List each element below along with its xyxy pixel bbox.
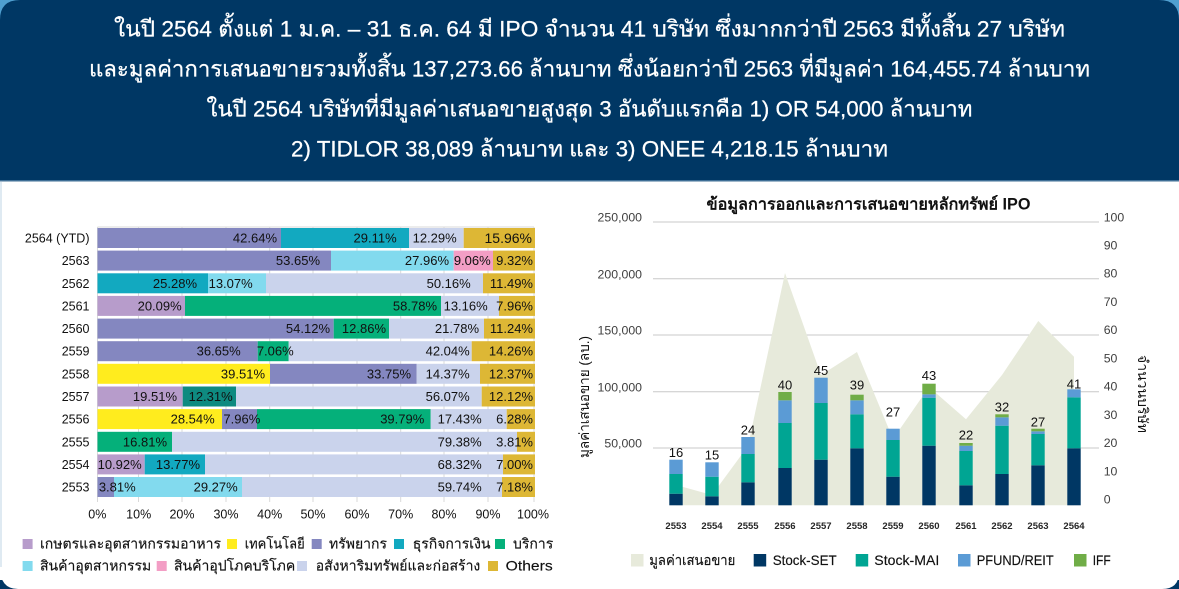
bar 2558: 2558 bbox=[846, 521, 868, 532]
row 2557: 56.07% bbox=[426, 389, 470, 404]
row 2556 bbox=[62, 409, 535, 429]
bar 2560: 43 bbox=[922, 368, 936, 383]
row 2556: 7.96% bbox=[223, 412, 261, 427]
right axis labels: 60 bbox=[1104, 323, 1118, 337]
percent axis labels: 10% bbox=[126, 508, 151, 522]
row 2563: 53.65% bbox=[276, 253, 320, 268]
right axis labels: 0 bbox=[1104, 492, 1111, 506]
row 2561: 2561 bbox=[62, 299, 90, 313]
bar 2553: 2553 bbox=[665, 521, 687, 532]
legend: sectors: ทรัพยากร bbox=[329, 536, 388, 552]
row 2560: 21.78% bbox=[435, 321, 479, 336]
row 2560: 54.12% bbox=[286, 321, 330, 336]
row 2559: 14.26% bbox=[489, 344, 533, 359]
row 2563 bbox=[62, 251, 535, 271]
percent axis labels: 40% bbox=[257, 508, 282, 522]
bar 2557: 2557 bbox=[810, 521, 832, 532]
percent axis labels bbox=[88, 508, 549, 522]
row 2558: 12.37% bbox=[489, 366, 533, 381]
header text line 3: ในปี 2564 บริษัทที่มีมูลค่าเสนอขายสูงสุด 3 อันดับแรกคือ 1) OR 54,000 ล้านบาท bbox=[206, 92, 972, 122]
header text line 2: และมูลค่าการเสนอขายรวมทั้งสิ้น 137,273.66 ล้านบาท ซึ่งน้อยกว่าปี 2563 ที่มีมูลค่า 164,455.74 ล้านบาท bbox=[89, 52, 1090, 82]
row 2562 bbox=[62, 273, 535, 293]
bar 2559: 27 bbox=[886, 404, 900, 420]
legend: sectors: เทคโนโลยี bbox=[245, 536, 305, 552]
row 2558: 33.75% bbox=[367, 366, 411, 381]
row 2553 bbox=[62, 477, 535, 497]
legend: sectors: สินค้าอุปโภคบริโภค bbox=[174, 558, 295, 574]
row 2553: 7.18% bbox=[496, 480, 533, 494]
bar 2556: 40 bbox=[778, 378, 792, 392]
row 2560: 11.24% bbox=[490, 321, 533, 336]
row 2562: 11.49% bbox=[490, 276, 533, 291]
row 2563: 27.96% bbox=[405, 253, 449, 268]
row 2564 bbox=[25, 228, 535, 248]
bar 2561: 22 bbox=[959, 428, 973, 442]
legend: IPO chart: IFF bbox=[1093, 552, 1111, 568]
combo chart: IPO value and count bbox=[576, 210, 1151, 532]
row 2564: 2564 (YTD) bbox=[25, 232, 90, 246]
row 2553: 3.81% bbox=[99, 480, 136, 494]
legend: IPO chart bbox=[631, 552, 1111, 569]
left axis labels: 200,000 bbox=[598, 268, 642, 282]
row 2554: 2554 bbox=[62, 458, 90, 472]
legend: sectors: สินค้าอุตสาหกรรม bbox=[40, 558, 151, 574]
bar 2555: 24 bbox=[741, 422, 755, 438]
percent axis labels: 70% bbox=[388, 508, 413, 522]
row 2560: 12.86% bbox=[342, 321, 386, 336]
percent axis labels: 50% bbox=[300, 508, 326, 522]
chart title: ข้อมูลการออกและการเสนอขายหลักทรัพย์ IPO bbox=[706, 194, 1030, 216]
legend: sectors: อสังหาริมทรัพย์และก่อสร้าง bbox=[316, 558, 480, 574]
header text line 1: ในปี 2564 ตั้งแต่ 1 ม.ค. – 31 ธ.ค. 64 มี IPO จำนวน 41 บริษัท ซึ่งมากกว่าปี 2563 มีทั้งสิ้น 27 บริษัท bbox=[114, 12, 1065, 42]
bar 2555: 2555 bbox=[737, 521, 759, 532]
row 2559 bbox=[62, 341, 535, 361]
percent axis labels: 90% bbox=[475, 508, 501, 522]
right axis title: จำนวนบริษัท bbox=[1135, 355, 1151, 433]
row 2564: 12.29% bbox=[413, 230, 457, 246]
row 2563: 2563 bbox=[62, 254, 90, 268]
right axis labels: 50 bbox=[1104, 352, 1118, 366]
row 2558 bbox=[62, 364, 535, 384]
legend: sectors: บริการ bbox=[513, 536, 554, 552]
left axis labels: 50,000 bbox=[604, 436, 642, 450]
bar 2553 bbox=[665, 445, 687, 532]
bar 2560 bbox=[918, 368, 940, 532]
row 2554: 7.00% bbox=[496, 457, 533, 472]
row 2561: 7.96% bbox=[496, 298, 533, 313]
bar 2554: 15 bbox=[705, 448, 719, 462]
header text line 4: 2) TIDLOR 38,089 ล้านบาท และ 3) ONEE 4,218.15 ล้านบาท bbox=[291, 136, 888, 162]
header panel bbox=[0, 0, 1179, 182]
bar 2564 bbox=[1063, 376, 1085, 532]
bar 2561: 2561 bbox=[955, 521, 977, 532]
percent axis labels: 30% bbox=[213, 508, 239, 522]
row 2559: 2559 bbox=[62, 345, 90, 359]
percent axis labels: 80% bbox=[431, 508, 457, 522]
percent axis labels: 20% bbox=[169, 508, 195, 522]
bar 2557: 45 bbox=[814, 363, 828, 378]
row 2557: 2557 bbox=[62, 390, 90, 404]
stacked bar chart: sector share by year bbox=[25, 227, 549, 522]
row 2559: 42.04% bbox=[426, 344, 470, 359]
bar 2558: 39 bbox=[850, 378, 864, 392]
row 2554 bbox=[62, 454, 535, 474]
bar 2555 bbox=[737, 422, 759, 532]
row 2560 bbox=[62, 319, 535, 339]
row 2555: 79.38% bbox=[438, 434, 482, 449]
row 2562: 13.07% bbox=[209, 276, 253, 291]
row 2564: 42.64% bbox=[233, 230, 277, 246]
left axis title: มูลค่าเสนอขาย (ลบ.) bbox=[576, 336, 593, 458]
bar 2563 bbox=[1027, 414, 1049, 532]
row 2561: 20.09% bbox=[138, 298, 182, 313]
bar 2564: 2564 bbox=[1063, 521, 1085, 532]
row 2555 bbox=[62, 432, 535, 452]
right axis labels: 10 bbox=[1104, 464, 1118, 478]
row 2557: 12.12% bbox=[489, 389, 533, 404]
right axis labels: 80 bbox=[1104, 266, 1118, 280]
bar 2556 bbox=[774, 378, 796, 532]
legend: sectors: ธุรกิจการเงิน bbox=[413, 536, 491, 552]
row 2554: 68.32% bbox=[438, 457, 482, 472]
row 2558: 14.37% bbox=[426, 366, 470, 381]
legend: IPO chart: PFUND/REIT bbox=[977, 552, 1054, 568]
percent axis labels: 0% bbox=[88, 508, 106, 522]
row 2556: 39.79% bbox=[380, 412, 425, 427]
bar 2564: 41 bbox=[1067, 376, 1081, 392]
bar 2556: 2556 bbox=[774, 521, 796, 532]
legend: sectors: เกษตรและอุตสาหกรรมอาหาร bbox=[40, 536, 221, 552]
right axis labels: 20 bbox=[1104, 436, 1118, 450]
row 2557 bbox=[62, 386, 535, 406]
row 2553: 59.74% bbox=[438, 480, 482, 494]
row 2562: 2562 bbox=[62, 277, 90, 291]
bar 2554 bbox=[701, 448, 723, 532]
bar 2559: 2559 bbox=[882, 521, 904, 532]
bar 2559 bbox=[882, 404, 904, 532]
row 2563: 9.06% bbox=[454, 253, 491, 268]
row 2556: 2556 bbox=[62, 413, 90, 427]
row 2555: 16.81% bbox=[123, 434, 167, 449]
right axis labels: 70 bbox=[1104, 295, 1118, 309]
row 2556: 6.28% bbox=[496, 412, 533, 427]
row 2554: 10.92% bbox=[98, 457, 142, 472]
row 2556: 17.43% bbox=[438, 412, 482, 427]
right axis labels: 40 bbox=[1104, 380, 1118, 394]
row 2557: 19.51% bbox=[133, 389, 177, 404]
legend: sectors bbox=[23, 536, 554, 574]
right axis labels: 90 bbox=[1104, 238, 1118, 252]
row 2560: 2560 bbox=[62, 322, 90, 336]
bar 2554: 2554 bbox=[701, 521, 723, 532]
row 2559: 7.06% bbox=[257, 344, 294, 359]
row 2564: 15.96% bbox=[485, 230, 532, 246]
percent axis labels: 60% bbox=[344, 508, 370, 522]
row 2561 bbox=[62, 296, 535, 316]
bar 2553: 16 bbox=[669, 445, 683, 460]
left axis labels bbox=[598, 210, 642, 450]
bar 2558 bbox=[846, 378, 868, 532]
bar 2563: 2563 bbox=[1027, 521, 1049, 532]
legend: sectors: Others bbox=[506, 558, 553, 574]
right axis labels: 30 bbox=[1104, 408, 1118, 422]
area: offering value bbox=[676, 273, 1074, 505]
row 2556: 28.54% bbox=[171, 412, 215, 427]
percent axis labels: 100% bbox=[517, 508, 549, 522]
row 2562: 25.28% bbox=[153, 276, 197, 291]
row 2564: 29.11% bbox=[354, 230, 397, 246]
legend: IPO chart: Stock-MAI bbox=[874, 552, 939, 568]
row 2561: 58.78% bbox=[393, 298, 437, 313]
row 2554: 13.77% bbox=[156, 457, 200, 472]
left axis labels: 100,000 bbox=[598, 380, 642, 394]
left axis labels: 250,000 bbox=[598, 210, 642, 224]
row 2553: 2553 bbox=[62, 480, 90, 494]
left axis labels: 150,000 bbox=[598, 324, 642, 338]
row 2558: 2558 bbox=[62, 367, 90, 381]
row 2559: 36.65% bbox=[197, 344, 241, 359]
bar 2563: 27 bbox=[1031, 414, 1045, 430]
row 2555: 2555 bbox=[62, 435, 90, 449]
bar 2561 bbox=[955, 428, 977, 532]
row 2558: 39.51% bbox=[221, 366, 265, 381]
row 2562: 50.16% bbox=[427, 276, 471, 291]
row 2557: 12.31% bbox=[189, 389, 233, 404]
bar 2562: 2562 bbox=[991, 521, 1013, 532]
legend: IPO chart: มูลค่าเสนอขาย bbox=[649, 552, 735, 569]
bar 2557 bbox=[810, 363, 832, 532]
bar 2560: 2560 bbox=[918, 521, 940, 532]
right axis labels: 100 bbox=[1104, 210, 1124, 224]
bar 2562: 32 bbox=[995, 400, 1009, 414]
bar 2562 bbox=[991, 400, 1013, 532]
row 2563: 9.32% bbox=[496, 253, 533, 268]
legend: IPO chart: Stock-SET bbox=[773, 552, 837, 568]
row 2555: 3.81% bbox=[496, 434, 533, 449]
row 2553: 29.27% bbox=[194, 480, 238, 494]
right axis labels bbox=[1104, 210, 1124, 506]
row 2561: 13.16% bbox=[444, 298, 488, 313]
